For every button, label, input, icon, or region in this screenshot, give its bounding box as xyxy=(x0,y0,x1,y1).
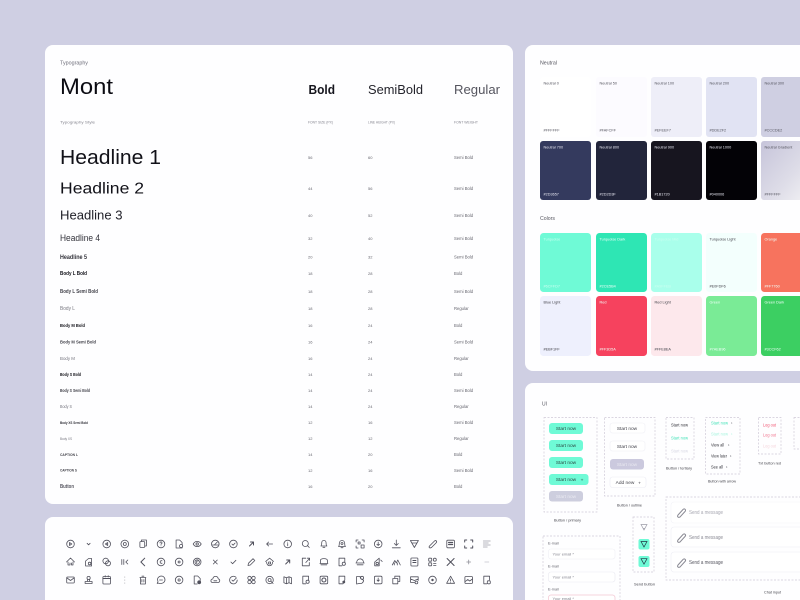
arrow buttons: Start now xyxy=(711,420,729,426)
e-mail inputs: E-mail xyxy=(548,542,559,546)
table values: font weight: Semi Bold xyxy=(454,420,474,425)
colour swatches: #6CFFD7 xyxy=(544,284,560,288)
outline buttons xyxy=(604,418,655,508)
type style names: Headline 2 xyxy=(60,180,144,198)
neutral swatches: Neutral 200 xyxy=(710,82,729,86)
table values: font size: 14 xyxy=(308,388,313,393)
arrow buttons: › xyxy=(730,454,732,458)
e-mail inputs: E-mail xyxy=(548,564,559,568)
arrow buttons xyxy=(706,418,740,484)
heading: UI: UI xyxy=(542,402,547,408)
primary buttons: Start now xyxy=(556,477,577,483)
icon row 1 xyxy=(67,540,490,548)
primary buttons: Start now xyxy=(556,460,577,466)
colour swatches: #EBF1FF xyxy=(544,348,560,352)
colour swatches: Turquoise xyxy=(544,238,560,242)
type style names: Body L Semi Bold xyxy=(60,289,98,295)
heading: typography: Typography xyxy=(60,60,89,66)
arrow buttons: See all xyxy=(711,464,723,470)
table values: font size: 56 xyxy=(308,155,313,160)
colour swatches: #FF7760 xyxy=(764,284,780,288)
tertiary buttons: Button / tertiary xyxy=(666,466,692,470)
font weight samples: Bold xyxy=(308,83,335,97)
tertiary buttons: Start now xyxy=(671,449,689,454)
neutral swatches: #2D2D3F xyxy=(600,192,616,196)
table values: font size: 12 xyxy=(308,468,313,473)
type style names: Body M Semi Bold xyxy=(60,340,96,344)
table values: line height xyxy=(368,155,373,489)
table values: line height: 32 xyxy=(368,254,373,260)
colour swatches: Turquoise Dark xyxy=(600,238,625,242)
table values: font weight: Bold xyxy=(454,452,463,457)
type style names: Headline 4 xyxy=(60,233,100,243)
colour swatches: #A9FFEB xyxy=(654,284,671,288)
chat input xyxy=(666,497,800,594)
arrow buttons: Button with arrow xyxy=(708,478,736,484)
send buttons: Send button xyxy=(634,582,655,586)
neutral swatches: #FAFCFF xyxy=(600,128,617,132)
type style names: Body M Bold xyxy=(60,323,85,328)
type style names: Body L xyxy=(60,306,75,312)
neutral swatches: Neutral 50 xyxy=(600,82,617,86)
neutral swatches: Neutral 0 xyxy=(544,82,559,86)
tertiary buttons: Start now xyxy=(671,423,689,428)
table values: font weight: Semi Bold xyxy=(454,468,474,473)
neutral swatches xyxy=(540,77,800,200)
outline buttons: Start now xyxy=(617,426,638,432)
table values: font size: 16 xyxy=(308,323,313,328)
type style names: Body M xyxy=(60,356,75,361)
tertiary buttons: Start now xyxy=(671,436,689,441)
table values: font size: 14 xyxy=(308,452,313,457)
send buttons xyxy=(633,517,655,586)
type style names: Headline 3 xyxy=(60,208,123,222)
table values: font weight: Bold xyxy=(454,323,463,328)
tertiary buttons xyxy=(666,418,694,470)
arrow buttons: › xyxy=(731,420,733,426)
type style names: Body XS xyxy=(60,437,73,441)
neutral swatches: Neutral 900 xyxy=(654,146,674,150)
type style names: Headline 5 xyxy=(60,255,88,261)
heading: neutral: Neutral xyxy=(540,60,557,66)
arrow buttons: View all xyxy=(711,442,724,448)
table values: line height: 24 xyxy=(368,340,373,344)
colour swatches: Turquoise Mid xyxy=(654,238,678,242)
table values: line height: 16 xyxy=(368,468,373,473)
neutral swatches: Neutral 800 xyxy=(600,146,619,150)
table header: FONT SIZE (PX) xyxy=(308,120,334,124)
neutral swatches: Neutral 100 xyxy=(654,82,674,86)
colour swatches: Blue Light xyxy=(544,300,561,304)
red text buttons: Txt button red xyxy=(758,460,781,466)
table values: font size: 44 xyxy=(308,186,313,191)
table values: line height: 24 xyxy=(368,356,373,361)
table values: font size: 12 xyxy=(308,420,313,425)
primary buttons xyxy=(544,418,597,522)
table values: font weight: Semi Bold xyxy=(454,213,474,218)
primary buttons: Start now xyxy=(556,443,577,449)
neutral swatches: #DDE2F2 xyxy=(710,128,726,132)
table values: font size: 20 xyxy=(308,254,313,260)
type style names: Body S Bold xyxy=(60,372,81,377)
table values: font size: 14 xyxy=(308,372,313,377)
table values: line height: 28 xyxy=(368,289,373,294)
table values: line height: 24 xyxy=(368,372,373,377)
table values: font weight: Semi Bold xyxy=(454,155,474,160)
table values: line height: 28 xyxy=(368,306,373,311)
colour swatches: #FFE8EA xyxy=(654,348,671,352)
arrow buttons: › xyxy=(731,432,733,436)
table values: line height: 40 xyxy=(368,236,373,241)
table header xyxy=(60,120,479,124)
table values: font weight: Regular xyxy=(454,404,469,409)
table values: font weight: Semi Bold xyxy=(454,254,474,260)
arrow buttons: › xyxy=(728,442,730,448)
chat input: Send a message xyxy=(689,535,723,541)
red text buttons: Log out xyxy=(763,444,777,448)
table values: font size: 18 xyxy=(308,306,313,311)
table values: font size: 40 xyxy=(308,213,313,218)
table values: font weight: Semi Bold xyxy=(454,186,474,191)
type style names: Body S xyxy=(60,404,72,409)
e-mail inputs xyxy=(543,536,620,600)
icon row 2 xyxy=(66,558,489,566)
table values: font weight: Bold xyxy=(454,372,463,377)
neutral swatches: #EFEEF7 xyxy=(654,128,671,132)
table values: font size: 14 xyxy=(308,404,313,409)
table values: font weight: Regular xyxy=(454,356,469,361)
arrow buttons: › xyxy=(726,464,728,470)
red text buttons: Log out xyxy=(763,432,777,438)
neutral swatches: #FFFFFF xyxy=(764,192,781,196)
table values: font weight: Semi Bold xyxy=(454,388,474,393)
table header: LINE HEIGHT (PX) xyxy=(368,120,396,124)
chat input: Send a message xyxy=(689,560,723,566)
colour swatches xyxy=(540,233,800,356)
table values: font size: 16 xyxy=(308,356,313,361)
table values: font weight: Semi Bold xyxy=(454,340,474,344)
neutral swatches: #040006 xyxy=(710,192,724,196)
table values: line height: 12 xyxy=(368,436,373,441)
panel: colour palette xyxy=(525,45,800,371)
type style names: CAPTION L xyxy=(60,452,78,457)
table header: Typography Style xyxy=(60,120,95,124)
colour swatches: Orange xyxy=(764,238,777,242)
table values: line height: 24 xyxy=(368,388,373,393)
table values: font weight: Regular xyxy=(454,306,469,311)
e-mail inputs: E-mail xyxy=(548,588,559,592)
outline buttons: Start now xyxy=(617,462,638,468)
type style names xyxy=(60,147,161,490)
colour swatches: #2CE5B4 xyxy=(600,284,616,288)
neutral swatches: #1B1720 xyxy=(654,192,670,196)
table values: line height: 24 xyxy=(368,404,373,409)
table values: line height: 20 xyxy=(368,484,373,489)
neutral swatches: #2D3657 xyxy=(544,192,559,196)
table values: font weight: Regular xyxy=(454,436,469,441)
table values: line height: 52 xyxy=(368,213,373,218)
neutral swatches: #FFFFFF xyxy=(544,128,560,132)
table values: line height: 56 xyxy=(368,186,373,191)
primary buttons: Start now xyxy=(556,426,577,432)
icon row 3 xyxy=(67,576,490,584)
table values: font size xyxy=(308,155,313,489)
neutral swatches: Neutral 300 xyxy=(764,82,784,86)
colour swatches: #7AEB96 xyxy=(710,348,726,352)
colour swatches: Turquoise Light xyxy=(710,238,736,242)
colour swatches: #E0FDF6 xyxy=(710,284,726,288)
colour swatches: Green Dark xyxy=(764,300,784,304)
table values: font size: 32 xyxy=(308,236,313,241)
neutral swatches: #CCCDE2 xyxy=(764,128,782,132)
arrow buttons: View later xyxy=(711,454,727,458)
outline buttons: + xyxy=(638,482,641,486)
clipped button group xyxy=(794,418,800,449)
font weight samples: Regular xyxy=(454,83,500,97)
chat input: Chat input xyxy=(764,590,782,594)
table values: font size: 18 xyxy=(308,289,313,294)
table values: line height: 16 xyxy=(368,420,373,425)
panel: icon set xyxy=(45,517,513,600)
font weight samples: SemiBold xyxy=(368,83,423,97)
colour swatches: #3CCF62 xyxy=(764,348,781,352)
colour swatches: Red Light xyxy=(654,300,672,304)
table values: font weight: Semi Bold xyxy=(454,289,474,294)
red text buttons xyxy=(758,418,781,466)
neutral swatches: Neutral Gradient xyxy=(764,146,793,150)
table values: line height: 24 xyxy=(368,323,373,328)
panel: typography xyxy=(45,45,513,504)
table header: FONT WEIGHT xyxy=(454,120,479,124)
primary buttons: Button / primary xyxy=(554,518,581,522)
table values: font weight: Semi Bold xyxy=(454,236,474,241)
font name: Mont: Mont xyxy=(60,74,113,99)
table values: font weight: Bold xyxy=(454,271,463,276)
type style names: Button xyxy=(60,484,74,490)
e-mail inputs: Your email * xyxy=(552,552,574,556)
arrow buttons: Start now xyxy=(711,432,729,436)
outline buttons: Button / outline xyxy=(617,502,643,508)
table values: font weight xyxy=(454,155,474,489)
table values: line height: 60 xyxy=(368,155,373,160)
table values: font size: 18 xyxy=(308,271,313,276)
table values: font size: 16 xyxy=(308,484,313,489)
table values: font size: 12 xyxy=(308,436,313,441)
colour swatches: Green xyxy=(710,300,720,304)
heading: colors: Colors xyxy=(540,216,556,222)
red text buttons: Log out xyxy=(763,422,777,428)
outline buttons: Add new xyxy=(616,480,635,486)
table values: font size: 16 xyxy=(308,340,313,344)
type style names: Headline 1 xyxy=(60,147,161,169)
type style names: CAPTION S xyxy=(60,468,78,472)
primary buttons: + xyxy=(581,478,584,484)
neutral swatches: Neutral 700 xyxy=(544,146,563,150)
type style names: Body S Semi Bold xyxy=(60,388,90,393)
primary buttons: Start now xyxy=(556,494,577,500)
panel: UI components xyxy=(525,383,800,600)
colour swatches: #FF3D5A xyxy=(600,348,616,352)
chat input: Send a message xyxy=(689,510,723,516)
colour swatches: Red xyxy=(600,300,606,304)
table values: line height: 20 xyxy=(368,452,373,457)
outline buttons: Start now xyxy=(617,444,638,450)
type style names: Body L Bold xyxy=(60,271,87,277)
font weight samples xyxy=(308,83,500,97)
type style names: Body XS Semi Bold xyxy=(60,421,88,425)
e-mail inputs: Your email * xyxy=(552,574,574,580)
table values: line height: 28 xyxy=(368,271,373,276)
table values: font weight: Bold xyxy=(454,484,463,489)
neutral swatches: Neutral 1000 xyxy=(710,146,731,150)
